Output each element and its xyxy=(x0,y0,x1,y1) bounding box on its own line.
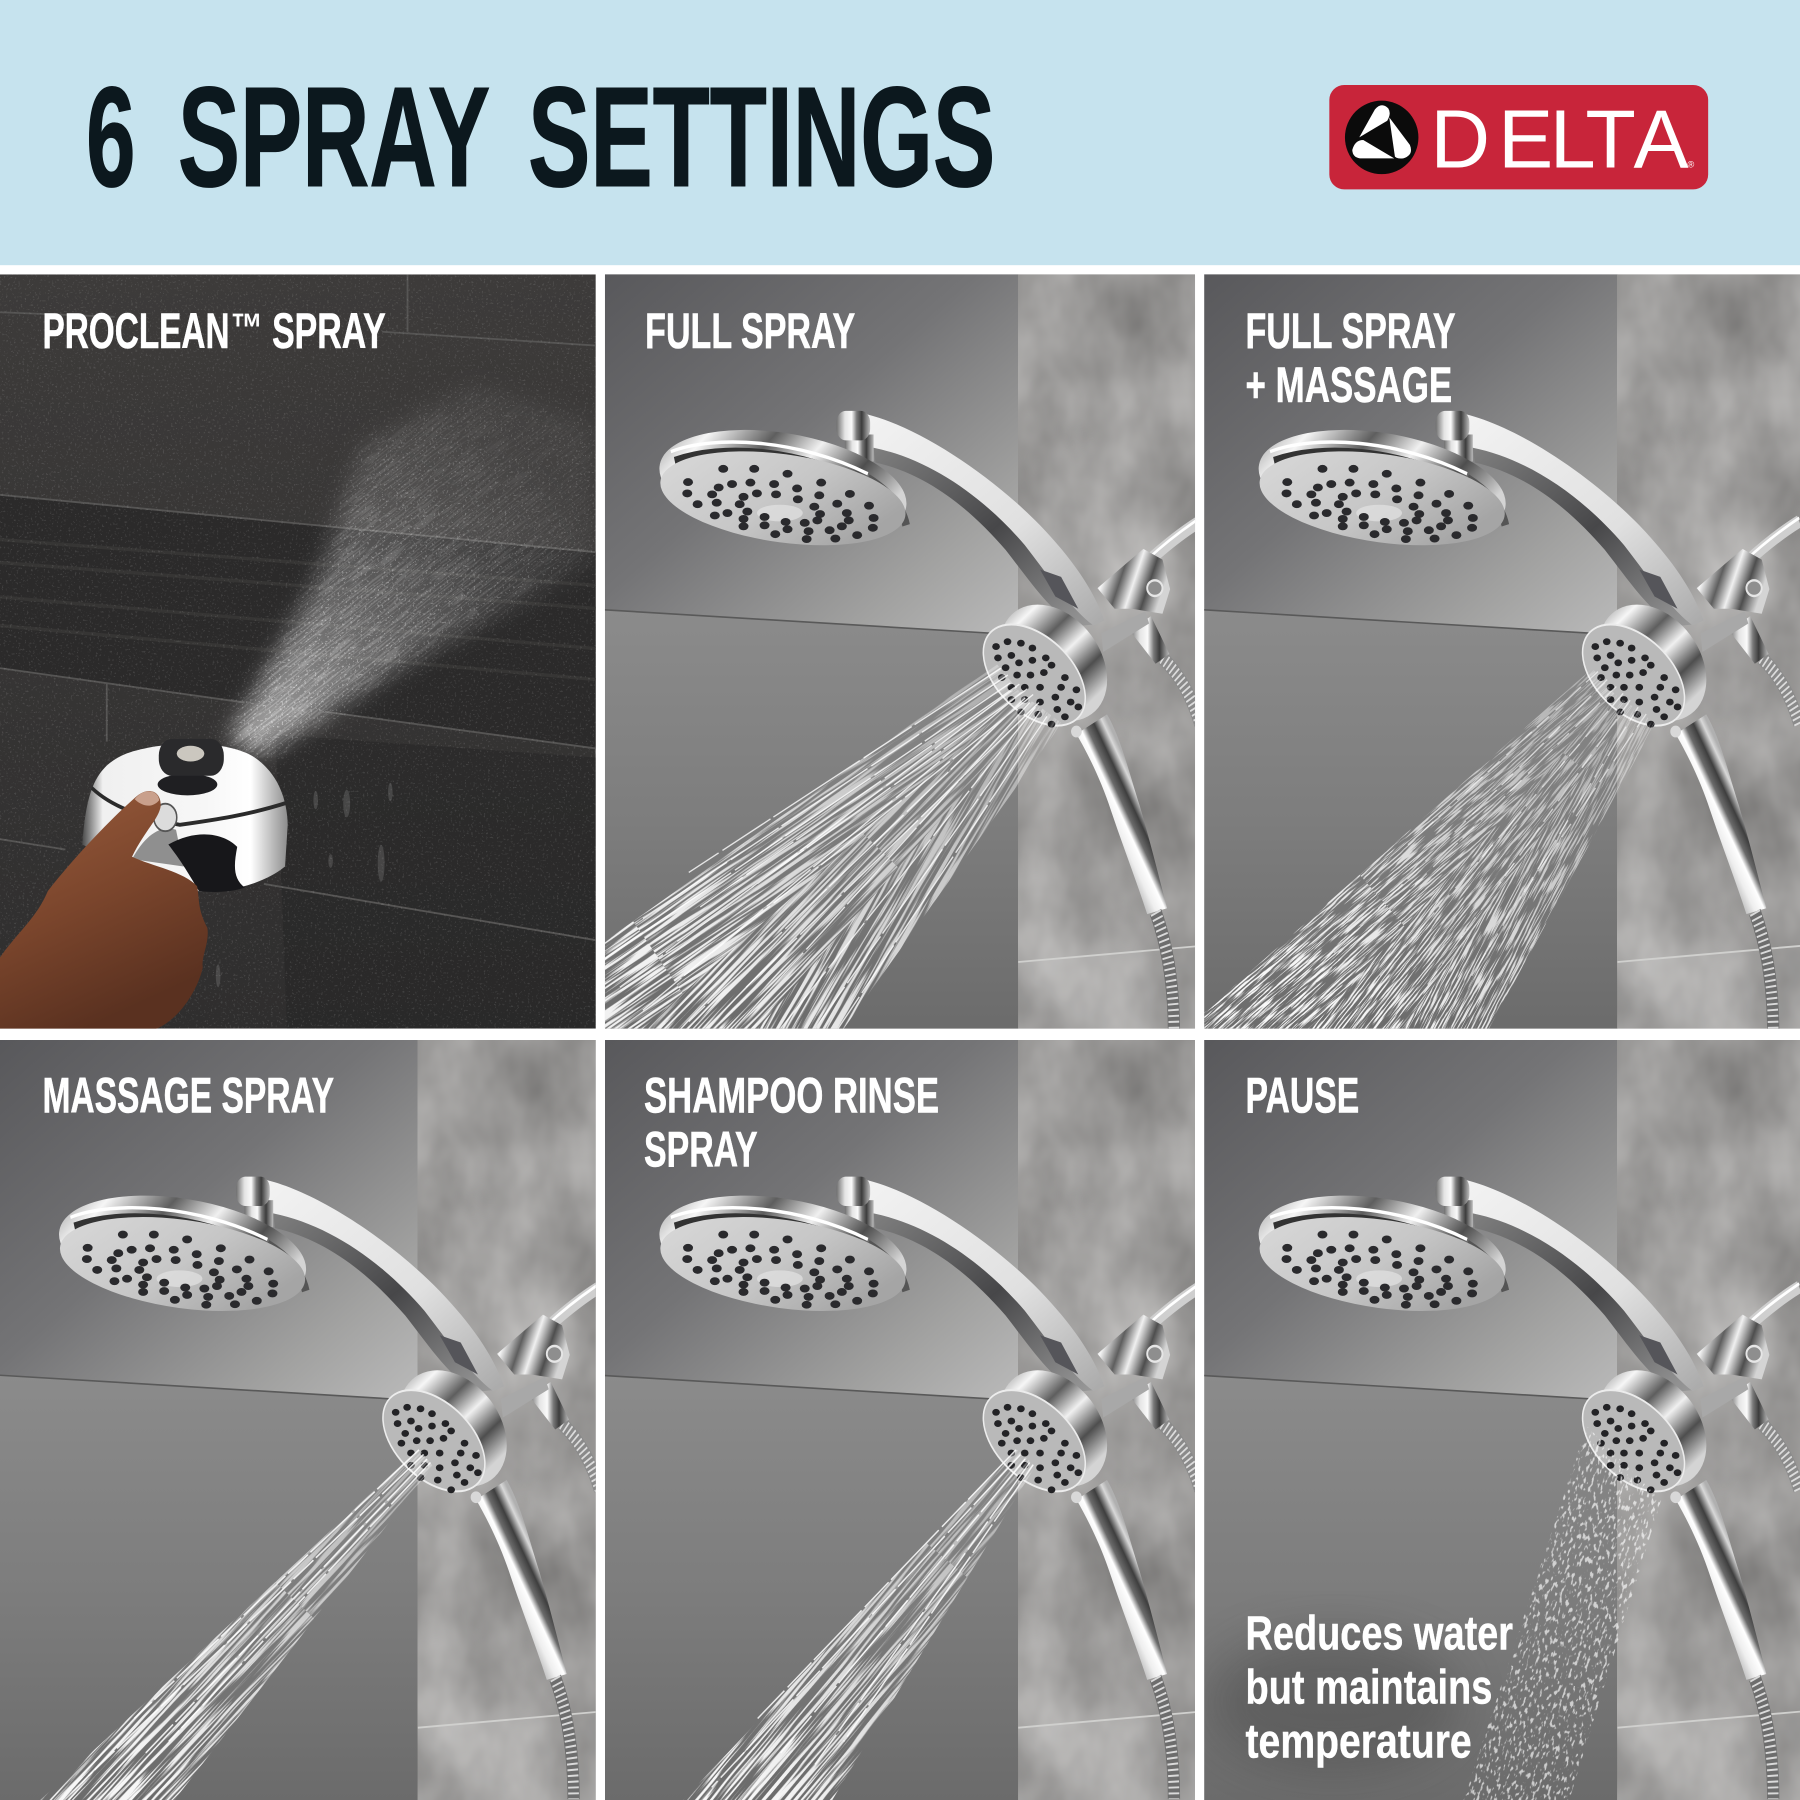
water spray xyxy=(1204,668,1655,1029)
logo: Delta: DELTA xyxy=(1430,93,1689,186)
title xyxy=(86,58,995,217)
panel: pause xyxy=(1204,1040,1800,1800)
label: PAUSE xyxy=(1246,1066,1359,1123)
logo: Delta: ® xyxy=(1688,160,1695,170)
label: FULL SPRAY xyxy=(645,302,855,359)
shower rig scene xyxy=(0,1039,600,1800)
label: SHAMPOO RINSE xyxy=(644,1066,939,1123)
shower rig scene xyxy=(1200,273,1800,1034)
panel: ProClean spray xyxy=(0,274,596,1029)
water spray xyxy=(683,1449,1035,1800)
label: SPRAY xyxy=(644,1120,758,1177)
dim shade behind text xyxy=(1208,1632,1460,1770)
shower rig scene xyxy=(600,1039,1201,1800)
icon: hand pressing spray button on chrome cap xyxy=(0,739,288,1030)
logo: Delta xyxy=(1329,85,1708,189)
description: Reduces water xyxy=(1246,1607,1513,1661)
water spray xyxy=(605,664,1062,1029)
header band xyxy=(0,0,1800,265)
title: 6 xyxy=(86,58,135,217)
water spray xyxy=(1464,1426,1661,1800)
mist spray cone xyxy=(218,367,596,758)
panel: shampoo rinse spray xyxy=(605,1040,1195,1800)
label: FULL SPRAY xyxy=(1246,302,1456,359)
label xyxy=(644,1066,939,1177)
label: MASSAGE SPRAY xyxy=(42,1066,334,1123)
title: SPRAY xyxy=(178,58,490,217)
panel: full spray xyxy=(604,274,1196,1029)
description: temperature xyxy=(1246,1715,1472,1769)
label: PROCLEAN xyxy=(42,302,230,359)
label xyxy=(1246,302,1456,413)
title: SETTINGS xyxy=(528,58,995,217)
shower rig scene xyxy=(1200,1039,1800,1800)
water spray xyxy=(40,1449,433,1800)
label: + MASSAGE xyxy=(1246,356,1452,413)
dark tile wall xyxy=(0,274,596,1029)
description xyxy=(1246,1607,1513,1769)
description: but maintains xyxy=(1246,1661,1492,1715)
label: ™ xyxy=(231,305,263,351)
label: SPRAY xyxy=(272,302,386,359)
panel: massage spray xyxy=(0,1040,596,1800)
panel: full spray plus massage xyxy=(1204,274,1800,1029)
shower rig scene xyxy=(600,273,1201,1034)
